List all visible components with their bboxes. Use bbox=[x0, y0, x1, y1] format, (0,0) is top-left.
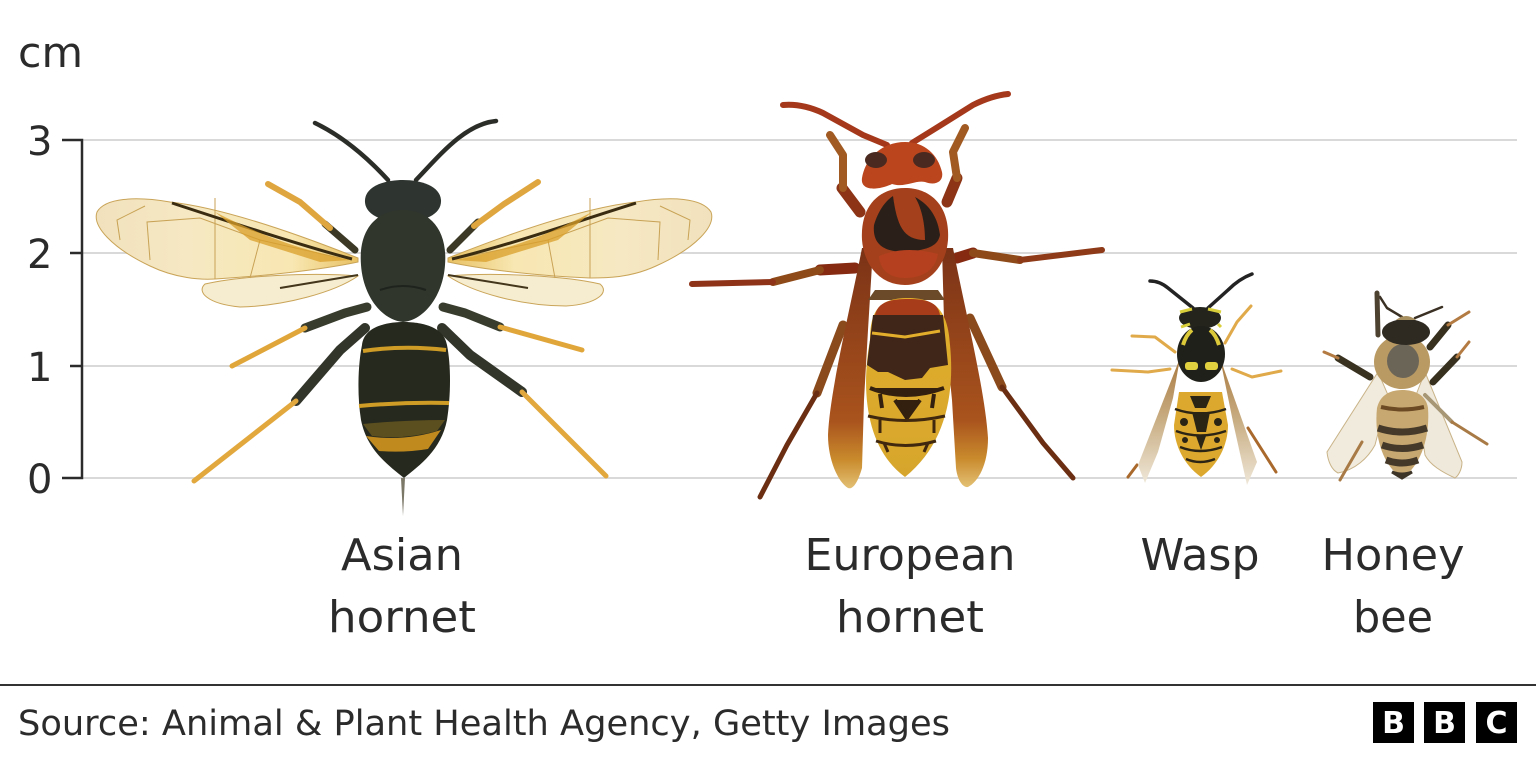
unit label: cm: cm bbox=[18, 28, 83, 77]
wings bbox=[1327, 372, 1388, 473]
label: Honey bee: bee bbox=[1353, 592, 1433, 643]
legs bbox=[194, 121, 606, 481]
legs and antennae bbox=[692, 94, 1102, 497]
chart axis and gridlines bbox=[62, 140, 1517, 478]
wing veins bbox=[117, 198, 690, 279]
y axis numbers bbox=[27, 119, 52, 503]
y axis numbers: 2 bbox=[27, 232, 52, 278]
insect: European hornet bbox=[692, 94, 1102, 497]
footer rule bbox=[0, 684, 1536, 686]
label: Honey bee bbox=[1322, 530, 1464, 643]
BBC logo: B bbox=[1433, 706, 1456, 741]
label: Asian hornet: Asian bbox=[341, 530, 463, 581]
label: European hornet: hornet bbox=[836, 592, 984, 643]
BBC logo: C bbox=[1485, 706, 1508, 741]
wings bbox=[828, 248, 873, 488]
source note: Source: Animal & Plant Health Agency, Getty Images bbox=[18, 704, 950, 744]
BBC logo bbox=[1373, 702, 1517, 743]
body bbox=[365, 180, 441, 222]
label: European hornet: European bbox=[804, 530, 1016, 581]
insect: honey bee bbox=[1324, 293, 1487, 480]
y axis numbers: 1 bbox=[27, 345, 52, 391]
label: Honey bee: Honey bbox=[1322, 530, 1464, 581]
label: Asian hornet bbox=[328, 530, 476, 643]
insect: Asian hornet bbox=[96, 121, 712, 516]
label: European hornet bbox=[804, 530, 1016, 643]
y axis numbers: 0 bbox=[27, 457, 52, 503]
label: Wasp: Wasp bbox=[1140, 530, 1260, 581]
wings bbox=[96, 199, 712, 307]
y axis numbers: 3 bbox=[27, 119, 52, 165]
body bbox=[862, 142, 942, 189]
BBC logo: B bbox=[1382, 706, 1405, 741]
insect: wasp bbox=[1112, 274, 1281, 485]
label: Asian hornet: hornet bbox=[328, 592, 476, 643]
